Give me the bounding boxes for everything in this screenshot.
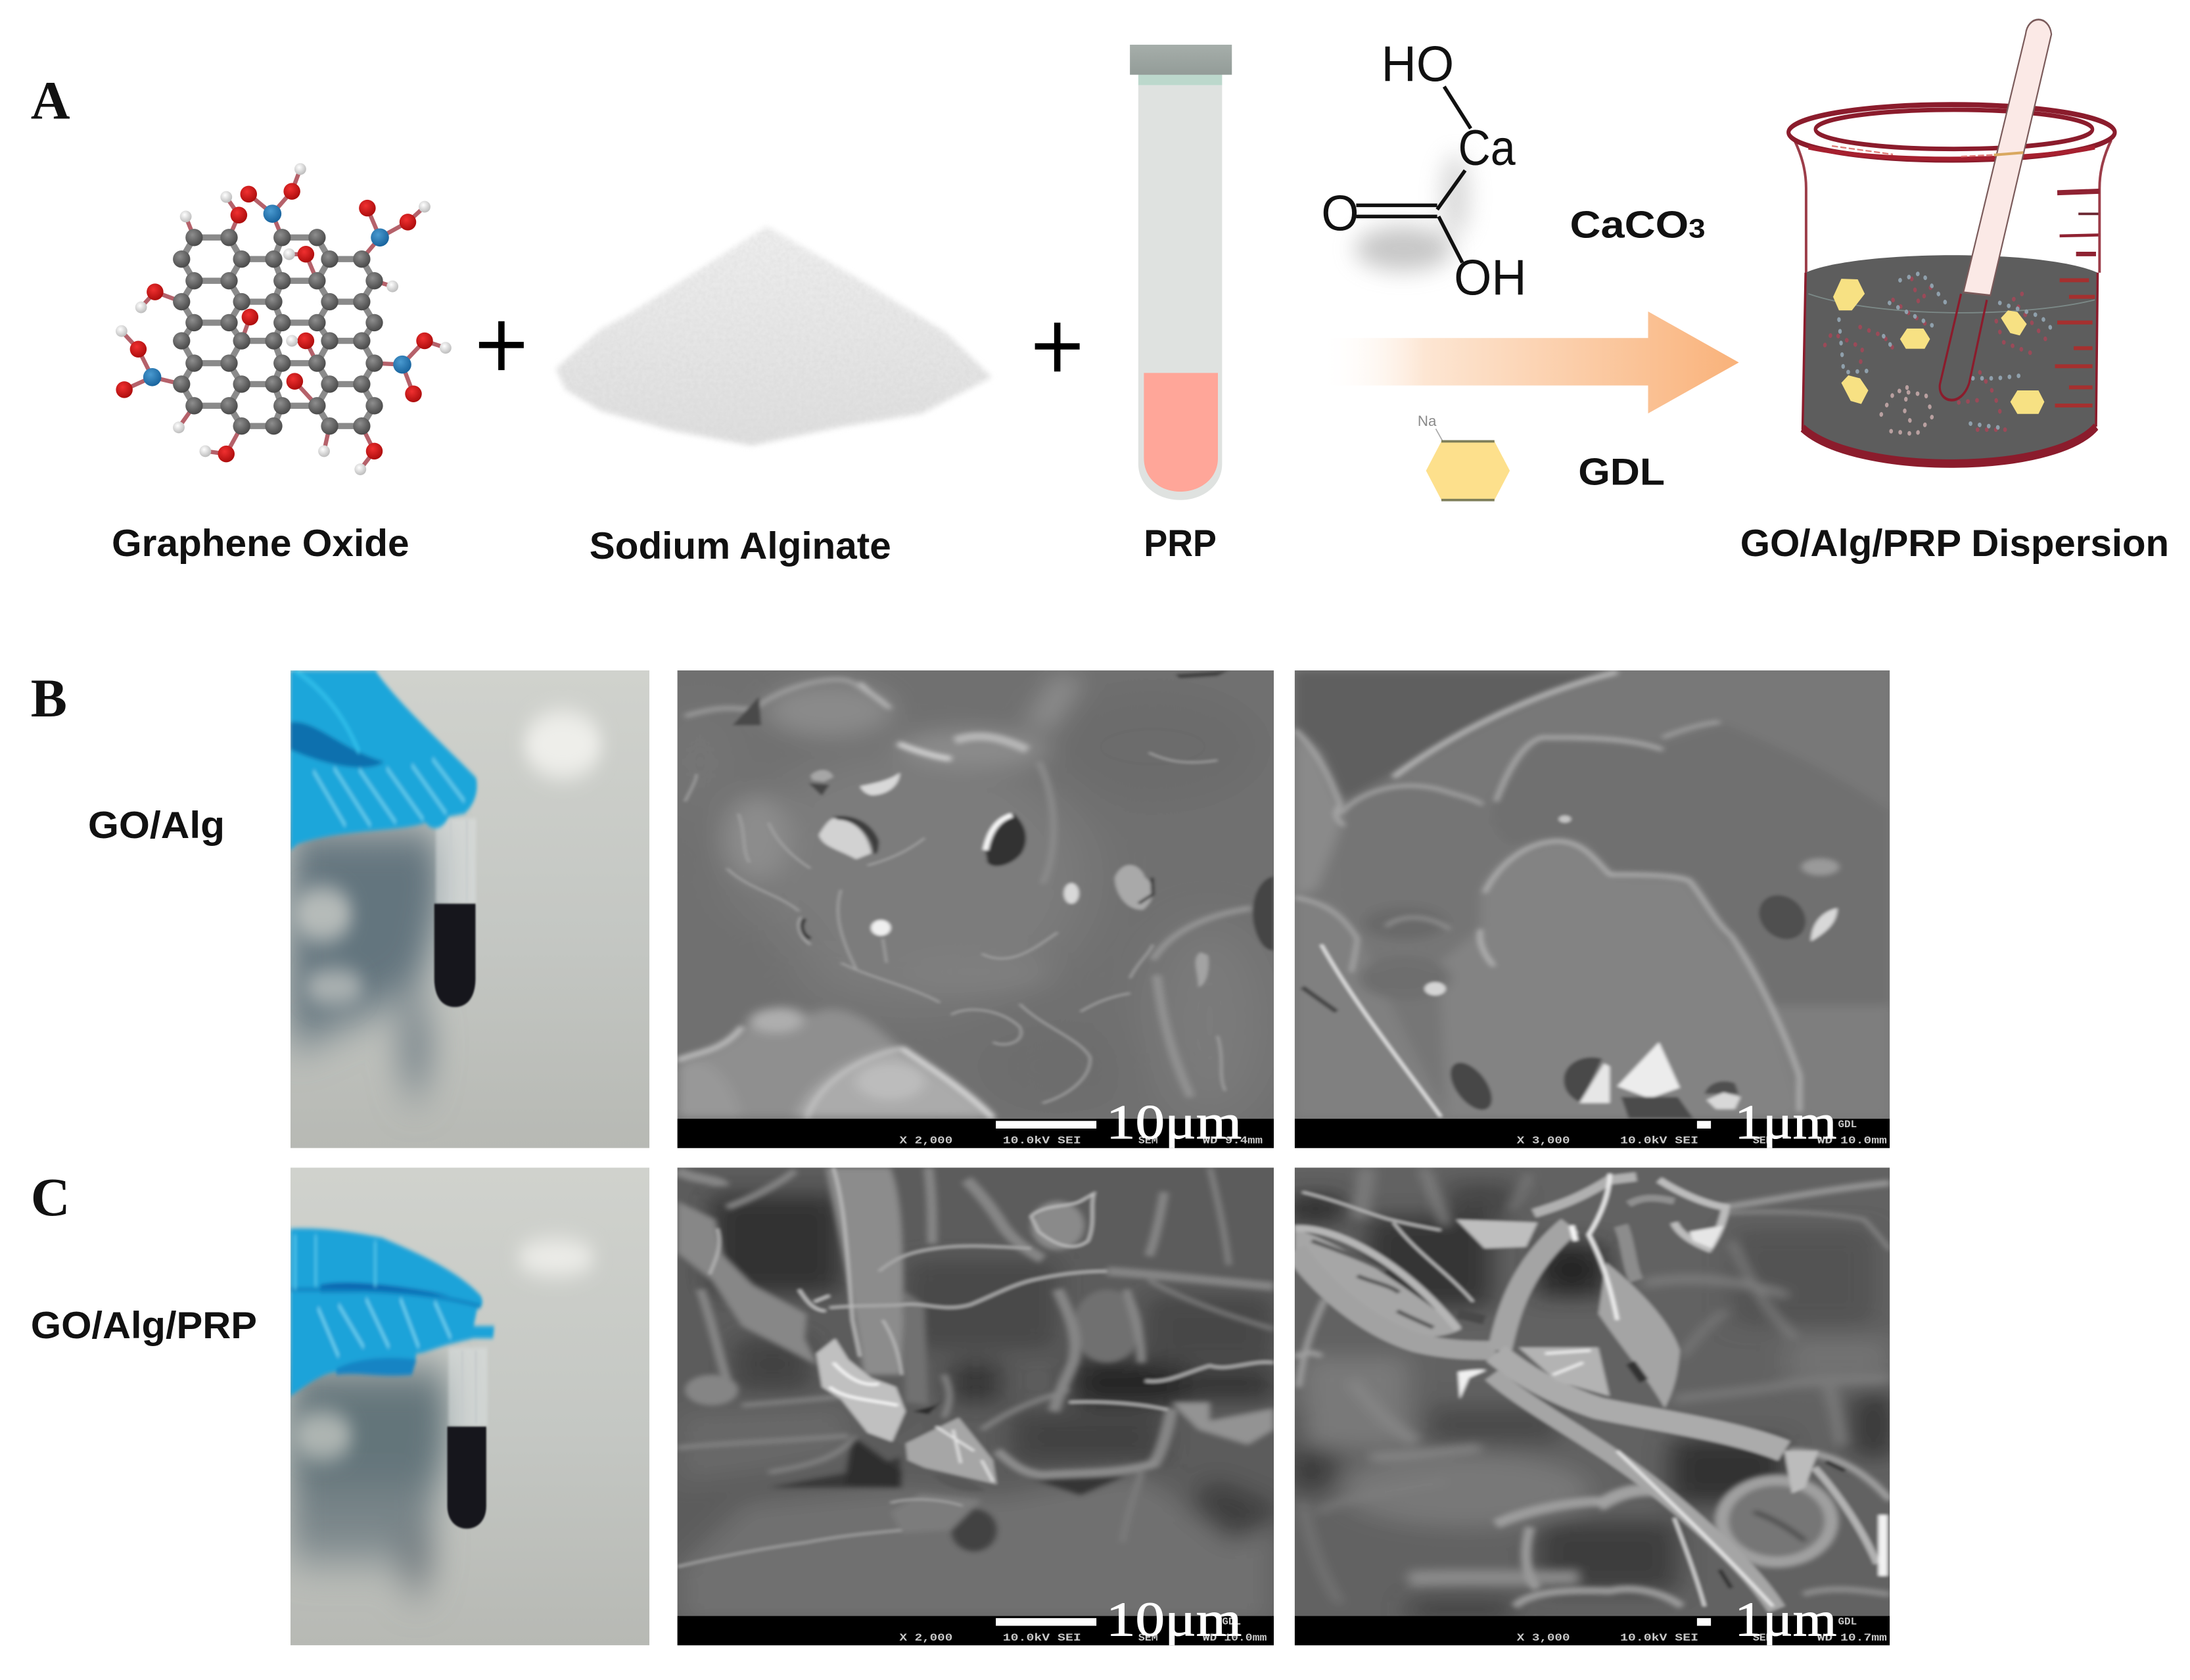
- SEM image: GO/Alg 3000x: SEM: [1753, 1134, 1773, 1146]
- plus sign: [479, 321, 524, 370]
- SEM image: GO/Alg 2000x: 10μm: [1106, 1096, 1242, 1150]
- icon: PRP test tube: [1130, 45, 1232, 500]
- chemical structure: CaCO3: Ca: [1458, 120, 1516, 176]
- arrow: [1320, 312, 1739, 413]
- SEM image: GO/Alg/PRP 3000x: 1μm: [1735, 1593, 1836, 1646]
- SEM image: GO/Alg/PRP 2000x: WD 10.0mm: [1203, 1632, 1267, 1644]
- SEM image: GO/Alg/PRP 3000x: WD 10.7mm: [1817, 1632, 1887, 1644]
- icon: GDL hexagon: [1418, 413, 1510, 500]
- photo: GO/Alg/PRP tube held in blue glove: [291, 1168, 649, 1645]
- label: PRP: PRP: [1144, 523, 1217, 565]
- SEM image: GO/Alg 3000x: [1295, 670, 1890, 1148]
- label: CaCO3: CaCO 3: [1570, 204, 1706, 246]
- SEM image: GO/Alg/PRP 2000x: [677, 1167, 1274, 1646]
- icon: sodium alginate powder pile: [556, 226, 992, 446]
- chemical structure: CaCO3: O: [1321, 186, 1359, 242]
- SEM image: GO/Alg/PRP 2000x: GDL: [1222, 1616, 1241, 1627]
- plus sign: [1035, 323, 1080, 371]
- panel label C: C: [31, 1167, 70, 1227]
- label: GDL: GDL: [1578, 451, 1665, 493]
- SEM image: GO/Alg 2000x: SEM: [1138, 1134, 1158, 1146]
- SEM image: GO/Alg/PRP 3000x: X 3,000: [1517, 1632, 1570, 1644]
- chemical structure: CaCO3: [1321, 36, 1527, 306]
- SEM image: GO/Alg 3000x: 1μm: [1735, 1096, 1836, 1150]
- SEM image: GO/Alg/PRP 3000x: SEM: [1753, 1632, 1773, 1644]
- icon: graphene oxide molecule: [116, 163, 452, 475]
- row label: GO/Alg/PRP: GO/Alg/PRP: [31, 1305, 257, 1347]
- SEM image: GO/Alg/PRP 3000x: GDL: [1838, 1616, 1857, 1627]
- SEM image: GO/Alg 2000x: 10.0kV SEI: [1003, 1134, 1081, 1146]
- SEM image: GO/Alg 2000x: X 2,000: [899, 1134, 952, 1146]
- panel label A: A: [31, 70, 70, 131]
- chemical structure: CaCO3: HO: [1382, 36, 1454, 92]
- label: GO/Alg/PRP Dispersion: GO/Alg/PRP Dispersion: [1740, 523, 2169, 565]
- SEM image: GO/Alg 3000x: GDL: [1838, 1119, 1857, 1131]
- SEM image: GO/Alg 3000x: WD 10.0mm: [1817, 1134, 1887, 1146]
- photo: GO/Alg tube held in blue glove: [291, 670, 649, 1148]
- chemical structure: CaCO3: OH: [1454, 250, 1527, 306]
- row label: GO/Alg: GO/Alg: [88, 805, 225, 847]
- SEM image: GO/Alg 2000x: [677, 670, 1274, 1148]
- label: Sodium Alginate: Sodium Alginate: [590, 525, 891, 567]
- SEM image: GO/Alg/PRP 2000x: X 2,000: [899, 1632, 952, 1644]
- SEM image: GO/Alg/PRP 3000x: [1295, 1167, 1890, 1646]
- icon: GDL hexagon: Na: [1418, 413, 1437, 429]
- SEM image: GO/Alg/PRP 3000x: 10.0kV SEI: [1620, 1632, 1698, 1644]
- SEM image: GO/Alg 2000x: WD 9.4mm: [1203, 1134, 1263, 1146]
- SEM image: GO/Alg 3000x: X 3,000: [1517, 1134, 1570, 1146]
- icon: beaker with dispersion and stirring rod: [1788, 20, 2115, 465]
- SEM image: GO/Alg 3000x: 10.0kV SEI: [1620, 1134, 1698, 1146]
- SEM image: GO/Alg/PRP 2000x: 10μm: [1106, 1593, 1242, 1646]
- label: Graphene Oxide: Graphene Oxide: [112, 523, 409, 565]
- SEM image: GO/Alg/PRP 2000x: SEM: [1138, 1632, 1158, 1644]
- panel label B: B: [31, 668, 67, 728]
- SEM image: GO/Alg/PRP 2000x: 10.0kV SEI: [1003, 1632, 1081, 1644]
